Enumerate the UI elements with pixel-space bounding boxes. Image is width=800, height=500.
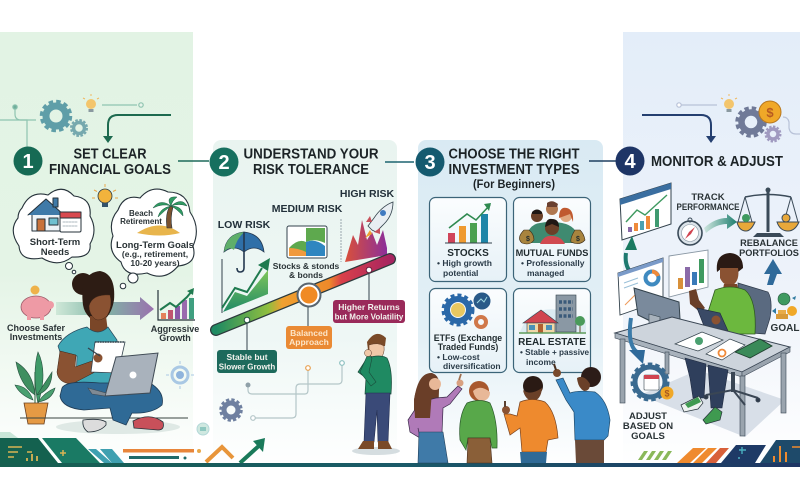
heading: choose the right investment types: CHOOSE THE RIGHT (448, 146, 580, 162)
arrow: blue upward (764, 259, 782, 285)
callout: stable growth (217, 350, 277, 373)
chart: high risk peaks (341, 219, 387, 262)
callout: higher returns: but More Volatility (335, 312, 404, 322)
bottom decorative banner left (0, 432, 201, 463)
heading: set clear financial goals (49, 146, 171, 178)
icon: palm island (137, 197, 187, 236)
label: real estate: income (526, 357, 556, 367)
label: track performance: PERFORMANCE (676, 202, 740, 213)
label: rebalance portfolios: PORTFOLIOS (739, 248, 799, 258)
label: goal: GOAL (771, 323, 799, 334)
arrow: into step one (103, 115, 171, 143)
card: mutual funds (514, 198, 590, 282)
person: woman in purple (408, 373, 464, 463)
panel: investment types background (418, 140, 603, 468)
panel: monitor and adjust background (623, 32, 800, 468)
label: adjust based on goals: GOALS (631, 431, 665, 442)
label: choose safer investments (7, 323, 65, 342)
label: low risk: LOW RISK (218, 219, 271, 231)
label: track performance (676, 192, 740, 213)
label: stocks (437, 248, 492, 278)
icon: piggy bank (21, 286, 54, 320)
icon: people with money bags (519, 201, 585, 244)
bottom stripe (0, 463, 800, 467)
icon: ETF gears (443, 294, 489, 327)
thought cloud: long-term goals (111, 189, 196, 276)
slider handle (298, 284, 320, 306)
label: medium risk: MEDIUM RISK (272, 203, 343, 215)
circuit line right (677, 103, 800, 134)
label: long-term goals (116, 240, 194, 268)
connector 3 to 4 (589, 160, 617, 162)
label: rebalance portfolios: REBALANCE (740, 238, 798, 248)
desk (615, 317, 790, 436)
icon: people with money bags: $ (576, 236, 580, 243)
arrow: safer to aggressive (56, 297, 154, 320)
label: ETFs: Traded Funds) (438, 342, 498, 352)
label: short-term needs (30, 237, 80, 258)
heading: understand your risk tolerance: RISK TOLERANCE (253, 162, 369, 178)
monitor (634, 288, 699, 341)
arrow: curved teal upward (625, 236, 637, 275)
icon: gears and coin (737, 101, 781, 142)
card: ETFs (430, 288, 506, 372)
label: stocks and bonds (273, 261, 340, 280)
person: man at desk (689, 253, 755, 334)
label: ETFs: diversification (443, 361, 501, 371)
label: beach retirement (120, 209, 162, 226)
label: short-term needs: Short-Term (30, 237, 80, 248)
panel: set clear financial goals background (0, 32, 193, 468)
label: real estate: REAL ESTATE (518, 337, 586, 348)
callout: balanced approach (286, 326, 332, 349)
label: choose safer investments: Choose Safer (7, 323, 65, 333)
icon: target decoration (166, 361, 194, 389)
icon: people with money bags: $ (526, 236, 530, 243)
ground line (20, 417, 188, 419)
icon: light bulb top right (721, 94, 737, 112)
floor shadow (640, 370, 785, 437)
icon: calendar (60, 212, 81, 232)
arrow: compass to scales (704, 214, 737, 233)
label: choose safer investments: Investments (10, 332, 62, 342)
thought bubbles (66, 262, 138, 289)
label: stocks: STOCKS (447, 248, 489, 259)
person: man in blue (553, 364, 610, 463)
label: aggressive growth (151, 324, 199, 343)
label: aggressive growth: Aggressive (151, 324, 199, 334)
label: stocks: potential (443, 268, 478, 278)
callout: higher returns: Higher Returns (338, 302, 400, 312)
icon: gear calendar: $ (664, 388, 670, 398)
card: stocks (430, 198, 506, 282)
label: real estate: • Stable + passive (520, 348, 590, 357)
label: rebalance portfolios (739, 238, 799, 258)
icon: house (28, 198, 64, 231)
badge: number 2 (210, 148, 238, 176)
heading: understand your risk tolerance (244, 146, 379, 178)
label: adjust based on goals: BASED ON (623, 421, 673, 432)
callout: higher returns (333, 300, 405, 323)
label: beach retirement: Beach (129, 209, 153, 218)
connector 1 to 2 (178, 160, 209, 162)
label: mutual funds: managed (527, 268, 564, 278)
card: real estate (514, 288, 590, 372)
person: man in green (460, 381, 497, 463)
label: mutual funds: MUTUAL FUNDS (516, 248, 588, 258)
icon: balanced allocation chart (287, 226, 327, 258)
icon: plant (15, 352, 55, 424)
icon: rocket (365, 202, 393, 238)
label: short-term needs: Needs (41, 247, 69, 258)
arrow: blue downward (629, 318, 645, 364)
icon: gear calendar (632, 364, 674, 400)
circuit lines top left (0, 103, 143, 150)
label: high risk: HIGH RISK (340, 188, 395, 200)
icon: gear panel 2 (220, 400, 242, 420)
badge: number 3: 3 (424, 152, 436, 174)
icon: light bulb top (83, 94, 99, 112)
callout: stable growth: Stable but (226, 352, 268, 362)
callout: balanced approach: Approach (289, 337, 329, 347)
label: adjust based on goals (623, 411, 673, 442)
risk slider (216, 259, 390, 350)
icon: growth chart (158, 288, 195, 320)
window: bar chart (669, 250, 708, 297)
chart: low risk growth (222, 258, 270, 313)
badge: number 3 (416, 148, 444, 176)
label: ETFs: • Low-cost (437, 352, 480, 362)
label: ETFs (434, 333, 502, 371)
chair base (704, 372, 760, 405)
badge: number 1 (14, 146, 42, 176)
arrow: into step four (642, 115, 716, 143)
heading: set clear financial goals: SET CLEAR (74, 146, 147, 162)
label: aggressive growth: Growth (159, 333, 191, 343)
icon: umbrella (224, 232, 264, 272)
icon: stocks chart (445, 203, 492, 243)
heading: monitor and adjust: MONITOR & ADJUST (651, 154, 783, 170)
icon: light bulb centre (92, 184, 118, 207)
label: beach retirement: Retirement (120, 217, 162, 226)
papers on desk (675, 332, 772, 360)
heading: choose the right investment types: (For Beginners) (473, 179, 555, 191)
callout: stable growth: Slower Growth (219, 362, 275, 372)
people pointing at cards (408, 364, 610, 463)
icon: large gear (42, 102, 70, 130)
heading: choose the right investment types: INVESTMENT TYPES (448, 162, 580, 178)
badge: number 4 (616, 146, 644, 176)
connector 2 to 3 (385, 161, 414, 163)
badge: number 4: 4 (624, 151, 636, 173)
window: donut chart (618, 258, 663, 315)
icon: buildings (519, 295, 586, 333)
label: stocks and bonds: & bonds (289, 270, 323, 280)
label: stocks: • High growth (437, 258, 492, 268)
icon: gears and coin: $ (766, 105, 774, 120)
bottom decorative banner right (638, 440, 800, 463)
badge: number 1: 1 (22, 151, 34, 173)
heading: choose the right investment types (448, 146, 580, 191)
label: long-term goals: Long-Term Goals (116, 240, 194, 251)
icon: chart window (620, 183, 671, 240)
icon: small gear (71, 120, 87, 136)
bottom decorative arrows (206, 438, 265, 463)
badge: number 2: 2 (218, 152, 230, 174)
heading: set clear financial goals: FINANCIAL GOALS (49, 162, 171, 178)
icon: balance scales (737, 188, 799, 237)
panel: risk tolerance background (213, 140, 397, 468)
heading: understand your risk tolerance: UNDERSTAND YOUR (244, 146, 379, 162)
label: mutual funds: • Professionally (521, 258, 585, 268)
label: adjust based on goals: ADJUST (629, 411, 667, 422)
callout: balanced approach: Balanced (290, 328, 328, 338)
person: man in orange (502, 376, 558, 463)
label: real estate (518, 337, 590, 367)
label: mutual funds (516, 248, 588, 278)
icon: goal coins (772, 293, 797, 319)
label: long-term goals: 10-20 years) (130, 258, 180, 268)
icon: small decoration right (197, 423, 209, 435)
person: woman with laptop (56, 271, 180, 434)
monitoring desk scene (615, 250, 790, 437)
label: long-term goals: (e.g., retirement, (122, 249, 188, 259)
label: track performance: TRACK (691, 192, 725, 203)
man's legs and shoes (681, 358, 728, 424)
connector lines (246, 361, 344, 420)
icon: compass (678, 218, 702, 245)
label: stocks and bonds: Stocks & stonds (273, 261, 340, 271)
person: thinking man (352, 334, 400, 455)
label: ETFs: ETFs (Exchange (434, 333, 502, 343)
thought cloud: short-term needs (13, 189, 94, 263)
chair (738, 283, 771, 334)
